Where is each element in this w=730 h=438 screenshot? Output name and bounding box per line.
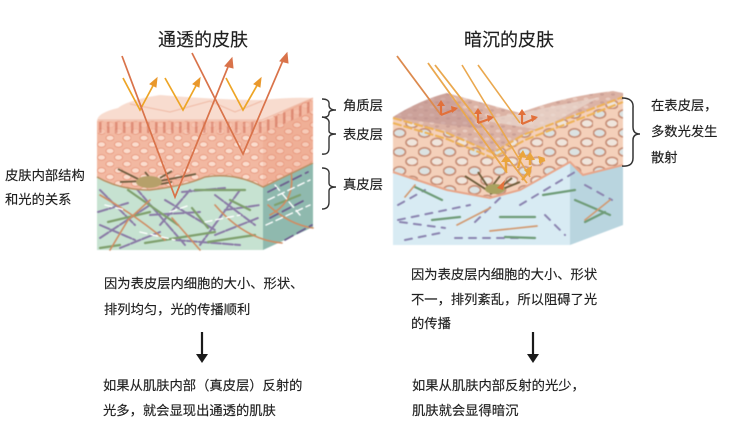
- arrow: clear skin: [196, 332, 208, 363]
- label: dermis: 真皮层: [343, 177, 383, 192]
- stratum corneum top: [97, 95, 313, 121]
- light rays: dull skin: [397, 56, 545, 190]
- bracket: stratum corneum: [322, 99, 336, 117]
- basement membrane line: [97, 163, 313, 190]
- text: clear skin cause: [104, 276, 303, 317]
- text: clear skin result: 光多，就会显现出通透的肌肤: [103, 402, 276, 418]
- dermis front face: [393, 162, 570, 245]
- epidermis side face: [263, 98, 313, 187]
- label: scattering note: 散射: [651, 150, 678, 165]
- label: scattering note: 在表皮层，: [651, 98, 717, 113]
- label: skin structure and light: 皮肤内部结构: [5, 168, 85, 183]
- ridge layer: [97, 100, 313, 133]
- dermis side face: [263, 163, 313, 250]
- melanocyte cell: [465, 172, 520, 194]
- text: dull skin cause: 因为表皮层内细胞的大小、形状: [411, 267, 597, 282]
- text: clear skin cause: 排列均匀，光的传播顺利: [104, 302, 250, 317]
- melanocyte cell: [118, 169, 196, 188]
- bracket: dermis: [322, 168, 336, 209]
- label: epidermis: 表皮层: [343, 127, 383, 142]
- light rays: clear skin: [122, 53, 288, 197]
- basement edge: [393, 162, 623, 198]
- label: scattering note: [651, 98, 717, 165]
- deep reflected rays: [122, 56, 230, 197]
- label: stratum corneum: 角质层: [343, 98, 383, 113]
- stratum corneum top: [393, 91, 623, 153]
- text: dull skin result: 如果从肌肤内部反射的光少，: [412, 378, 585, 393]
- sparse fibres: [398, 172, 612, 240]
- label: skin structure and light: 和光的关系: [5, 192, 71, 207]
- skin block: clear skin: [97, 95, 313, 250]
- title: clear skin: 通透的皮肤: [158, 30, 248, 50]
- epidermis: [393, 97, 623, 198]
- skin block: dull skin: [393, 91, 623, 245]
- text: dull skin cause: [411, 267, 597, 331]
- bracket: epidermis: [322, 117, 336, 154]
- title: dull skin: 暗沉的皮肤: [464, 30, 554, 50]
- text: dull skin result: 肌肤就会显得暗沉: [412, 402, 518, 418]
- short reflected rays: [123, 78, 259, 110]
- text: clear skin result: 如果从肌肤内部（真皮层）反射的: [103, 378, 302, 393]
- text: dull skin cause: 的传播: [411, 316, 451, 331]
- epidermis front face: [97, 120, 263, 190]
- dermis front face: [97, 176, 263, 250]
- dermis fibres: [98, 167, 313, 250]
- text: dull skin result: [412, 378, 585, 418]
- label: skin structure and light: [5, 168, 85, 207]
- text: dull skin cause: 不一，排列紊乱，所以阻碍了光: [411, 291, 597, 307]
- scatter arrows: [441, 102, 536, 124]
- dermis side face: [570, 162, 623, 245]
- label: scattering note: 多数光发生: [651, 123, 717, 139]
- text: clear skin cause: 因为表皮层内细胞的大小、形状、: [104, 276, 303, 291]
- text: clear skin result: [103, 378, 302, 418]
- yellow granular band: [393, 97, 623, 158]
- bracket: scattering region: [622, 98, 640, 166]
- arrow: dull skin: [527, 332, 539, 363]
